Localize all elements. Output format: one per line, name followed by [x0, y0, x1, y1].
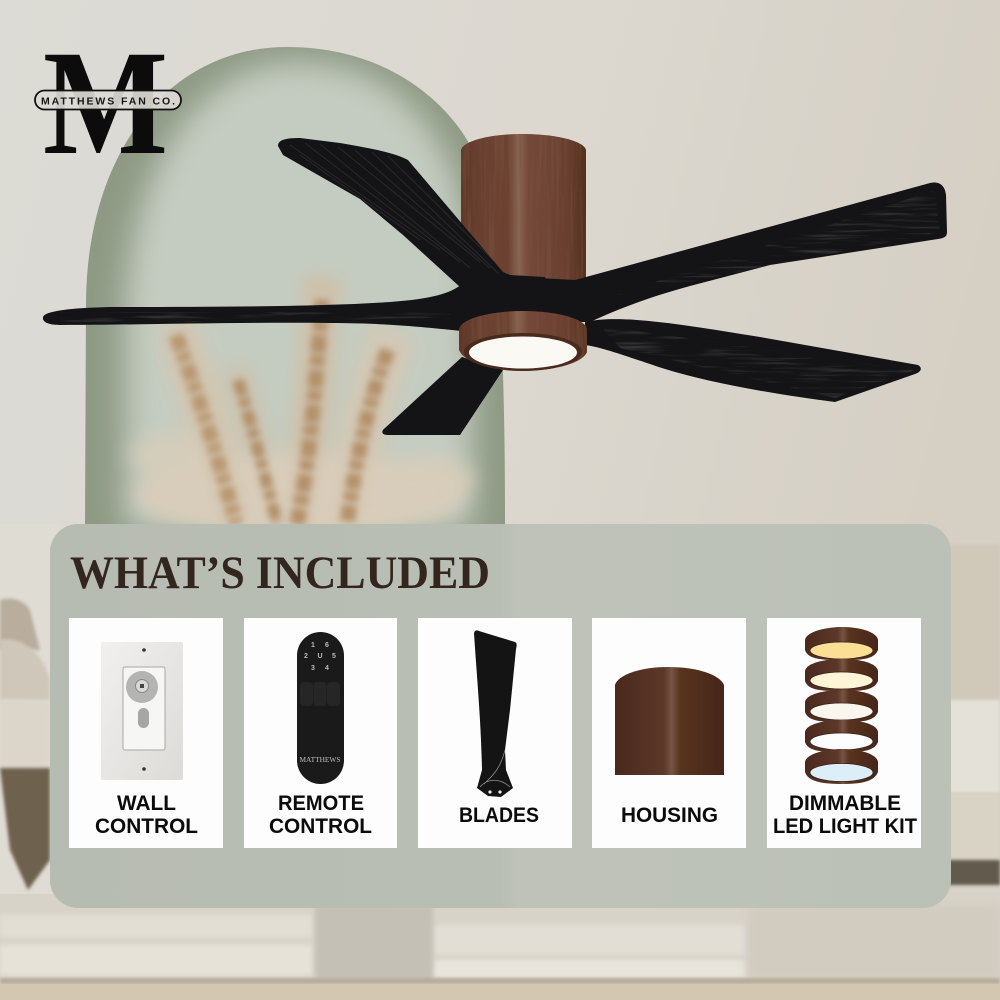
- icon: remote: U: [317, 653, 323, 660]
- icon: five LED rings: [805, 627, 878, 784]
- LED light frame: [464, 333, 582, 371]
- card: housing: HOUSING: [621, 804, 718, 827]
- icon: remote: 4: [325, 665, 329, 672]
- card: wall control: [69, 618, 223, 848]
- LED light: [469, 336, 577, 368]
- logo: Matthews Fan Co.: M: [43, 20, 168, 186]
- icon: remote: 2: [304, 653, 308, 660]
- icon: remote: 3: [311, 665, 315, 672]
- card: blades: BLADES: [459, 804, 539, 827]
- card: remote control: [244, 618, 397, 848]
- logo: Matthews Fan Co.: MATTHEWS FAN CO.: [41, 96, 175, 108]
- icon: remote: 6: [325, 642, 329, 649]
- icon: remote: 5: [332, 653, 336, 660]
- pampas grass: [130, 275, 475, 537]
- icon: remote: 1: [311, 642, 315, 649]
- fan blades: [43, 138, 947, 435]
- sofa right: [948, 545, 1000, 885]
- icon: housing: [615, 667, 724, 775]
- arched wall niche: [85, 47, 505, 524]
- icon: remote: MATTHEWS: [300, 755, 340, 764]
- icon: blade: [474, 630, 517, 797]
- card: housing: [592, 618, 746, 848]
- blade wood grain: [60, 190, 940, 398]
- floor: [0, 885, 1000, 1000]
- fan housing: [461, 134, 586, 290]
- heading: WHAT’S INCLUDED: [70, 547, 490, 599]
- card: wall control: WALL: [117, 792, 176, 815]
- card: remote control: REMOTE: [278, 792, 364, 815]
- sofa and cushions left: [0, 524, 60, 894]
- icon: remote: [297, 632, 344, 784]
- card: dimmable LED light kit: LED LIGHT KIT: [773, 815, 917, 838]
- card: wall control: CONTROL: [95, 815, 198, 838]
- icon: wall control: [101, 642, 183, 780]
- ceiling fan: [43, 134, 947, 435]
- panel: what's included: [50, 524, 951, 908]
- card: dimmable LED light kit: [767, 618, 921, 848]
- card: blades: [418, 618, 572, 848]
- card: dimmable LED light kit: DIMMABLE: [789, 792, 901, 815]
- light ring: [459, 311, 587, 371]
- card: remote control: CONTROL: [269, 815, 372, 838]
- upper blade diagonal grain: [290, 143, 500, 275]
